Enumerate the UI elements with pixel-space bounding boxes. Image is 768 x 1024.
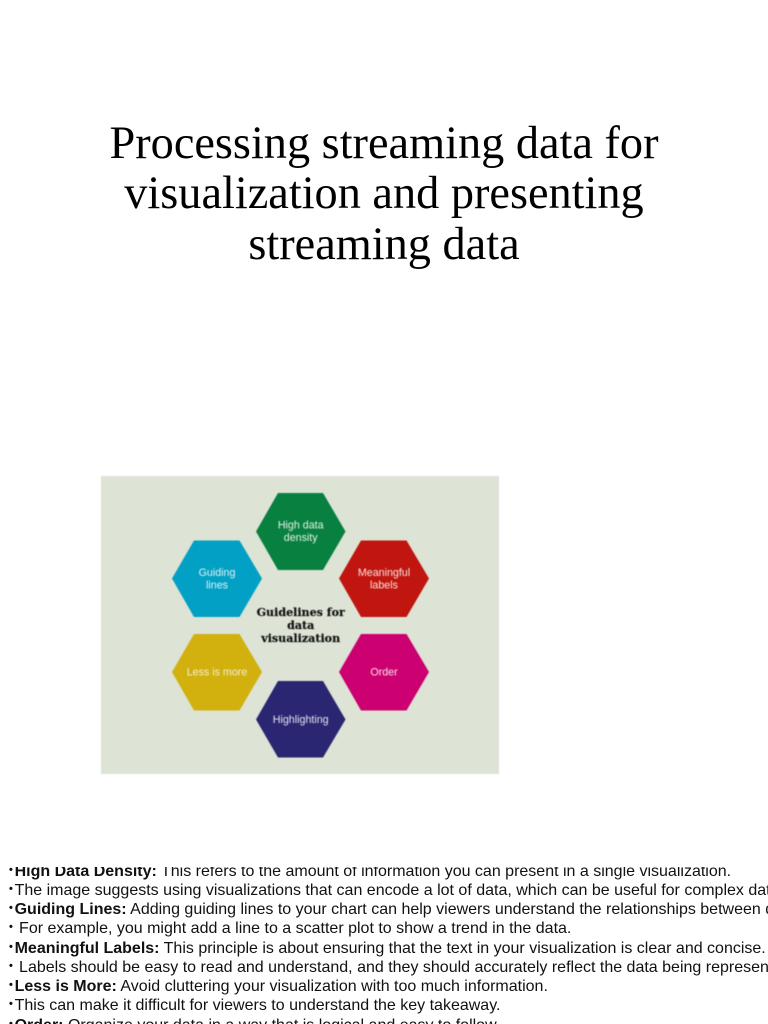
title: Processing streaming data for bbox=[110, 118, 658, 169]
center label bbox=[257, 606, 345, 645]
panel: guidelines diagram bbox=[100, 476, 500, 774]
hexagon: less is more: Less is more bbox=[187, 666, 247, 678]
text block: guideline notes: • bbox=[9, 979, 13, 991]
hexagon: highlighting: Highlighting bbox=[273, 714, 329, 726]
hexagon: order bbox=[339, 634, 429, 710]
hexagon: meaningful labels bbox=[339, 540, 429, 617]
text block: guideline notes: Less is More: Avoid cluttering your visualization with too much information. bbox=[15, 978, 548, 995]
text block: guideline notes: Meaningful Labels: This principle is about ensuring that the text in your visualization is clear and concise. bbox=[15, 940, 766, 956]
hexagon: guiding lines: lines bbox=[206, 580, 228, 592]
text block: guideline notes bbox=[9, 867, 768, 1024]
hexagon: meaningful labels: labels bbox=[370, 580, 398, 592]
hexagon: guiding lines: Guiding bbox=[199, 567, 235, 579]
hexagon: high data density bbox=[256, 493, 346, 570]
text block: guideline notes: • bbox=[9, 883, 13, 895]
hexagon: guiding lines bbox=[172, 540, 262, 617]
hexagon: less is more bbox=[172, 634, 262, 710]
text block: guideline notes: This can make it difficult for viewers to understand the key takeaway. bbox=[15, 997, 500, 1014]
center label: Guidelines for bbox=[257, 606, 345, 619]
hexagon: order: Order bbox=[370, 666, 398, 678]
center label: data bbox=[287, 619, 314, 632]
center label: visualization bbox=[260, 632, 340, 645]
title: streaming data bbox=[248, 219, 520, 270]
text block: guideline notes: • bbox=[9, 940, 13, 952]
title: visualization and presenting bbox=[124, 168, 644, 219]
text block: guideline notes: For example, you might add a line to a scatter plot to show a trend in the data. bbox=[19, 920, 571, 937]
hexagon: meaningful labels: Meaningful bbox=[358, 567, 410, 579]
text block: guideline notes: • bbox=[9, 960, 13, 972]
hexagon: highlighting bbox=[256, 681, 346, 758]
hexagon: high data density: density bbox=[284, 532, 318, 544]
text block: guideline notes: • bbox=[9, 998, 13, 1010]
title bbox=[110, 118, 658, 270]
hexagon: high data density: High data bbox=[278, 520, 324, 532]
text block: guideline notes: • bbox=[9, 902, 13, 914]
text block: guideline notes: • bbox=[9, 921, 13, 933]
